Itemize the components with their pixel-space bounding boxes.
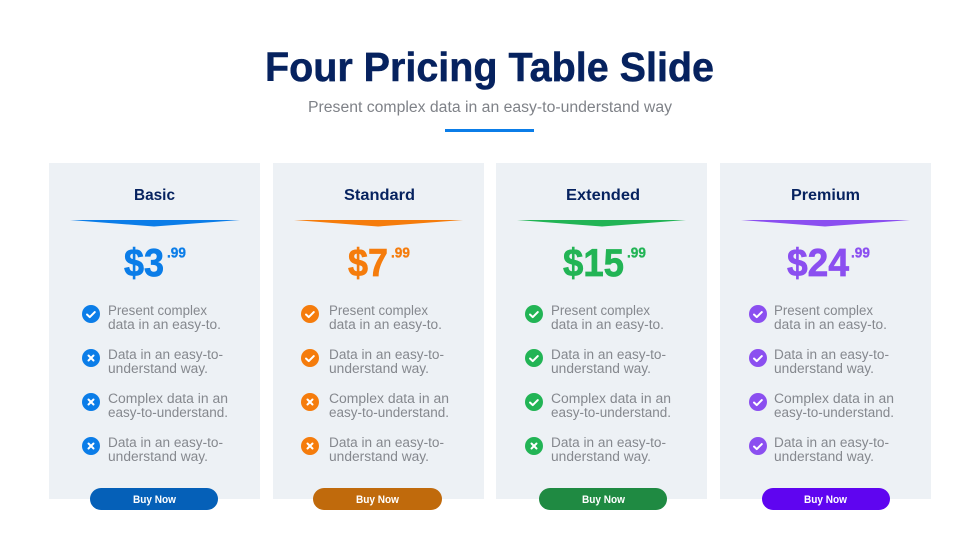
feature 2 [525,347,666,376]
feature 4 [749,435,889,464]
heading: extended: Extended [566,187,640,204]
feature 2 [301,347,444,376]
feature 3 [82,391,228,420]
feature 2: understand way. [551,361,651,376]
price: basic: .99 [167,246,186,262]
subtitle: Present complex data in an easy-to-understand way [308,99,672,116]
feature 3 [301,391,449,420]
button: extended: Buy Now [582,494,625,506]
heading: standard: Standard [344,187,415,204]
banner arrow: standard [294,220,463,226]
feature 1: Present complex [108,303,207,318]
title underline [445,129,534,132]
price: basic [124,242,186,285]
feature 4: understand way. [774,449,874,464]
button: extended [539,488,667,510]
price: basic: $3 [124,242,164,285]
feature 1: data in an easy-to. [774,317,887,332]
banner arrow: premium [741,220,910,226]
feature 4: understand way. [108,449,208,464]
button: premium: Buy Now [804,494,847,506]
feature 3: easy-to-understand. [108,405,228,420]
feature 4: understand way. [329,449,429,464]
feature 1 [525,303,664,332]
feature 2: understand way. [329,361,429,376]
button: basic [90,488,218,510]
feature 4: understand way. [551,449,651,464]
feature 1: data in an easy-to. [329,317,442,332]
feature 2: understand way. [108,361,208,376]
feature 3 [525,391,671,420]
feature 2: understand way. [774,361,874,376]
feature 1: data in an easy-to. [108,317,221,332]
feature 2: Data in an easy-to- [108,347,223,362]
feature 1 [749,303,887,332]
feature 3 [749,391,894,420]
feature 2 [749,347,889,376]
feature 1: Present complex [551,303,650,318]
price: extended: $15 [563,242,624,285]
feature 3: easy-to-understand. [774,405,894,420]
feature 4 [301,435,444,464]
feature 2: Data in an easy-to- [329,347,444,362]
feature 3: Complex data in an [551,391,671,406]
button: standard: Buy Now [356,494,399,506]
feature 4 [525,435,666,464]
price: standard [348,242,410,285]
price: premium: $24 [787,242,850,285]
feature 3: Complex data in an [108,391,228,406]
panel: standard [273,163,484,510]
feature 3: easy-to-understand. [329,405,449,420]
button: standard [313,488,442,510]
feature 1: Present complex [329,303,428,318]
price: extended: .99 [627,246,646,262]
feature 4 [82,435,223,464]
feature 1 [82,303,221,332]
feature 4: Data in an easy-to- [108,435,223,450]
feature 3: easy-to-understand. [551,405,671,420]
feature 1: Present complex [774,303,873,318]
feature 2: Data in an easy-to- [551,347,666,362]
banner arrow: basic [70,220,240,226]
price: standard: .99 [391,246,410,262]
feature 1: data in an easy-to. [551,317,664,332]
feature 4: Data in an easy-to- [329,435,444,450]
feature 3: Complex data in an [329,391,449,406]
feature 3: Complex data in an [774,391,894,406]
price: standard: $7 [348,242,388,285]
feature 4: Data in an easy-to- [774,435,889,450]
feature 2 [82,347,223,376]
feature 4: Data in an easy-to- [551,435,666,450]
button: premium [762,488,890,510]
banner arrow: extended [517,220,686,226]
price: premium: .99 [851,246,870,262]
heading: premium: Premium [791,187,860,204]
title: Four Pricing Table Slide [265,44,714,90]
panel: basic [49,163,260,510]
feature 2: Data in an easy-to- [774,347,889,362]
heading: basic: Basic [134,187,175,204]
panel: premium [720,163,931,510]
button: basic: Buy Now [133,494,176,506]
panel: extended [496,163,707,510]
feature 1 [301,303,442,332]
